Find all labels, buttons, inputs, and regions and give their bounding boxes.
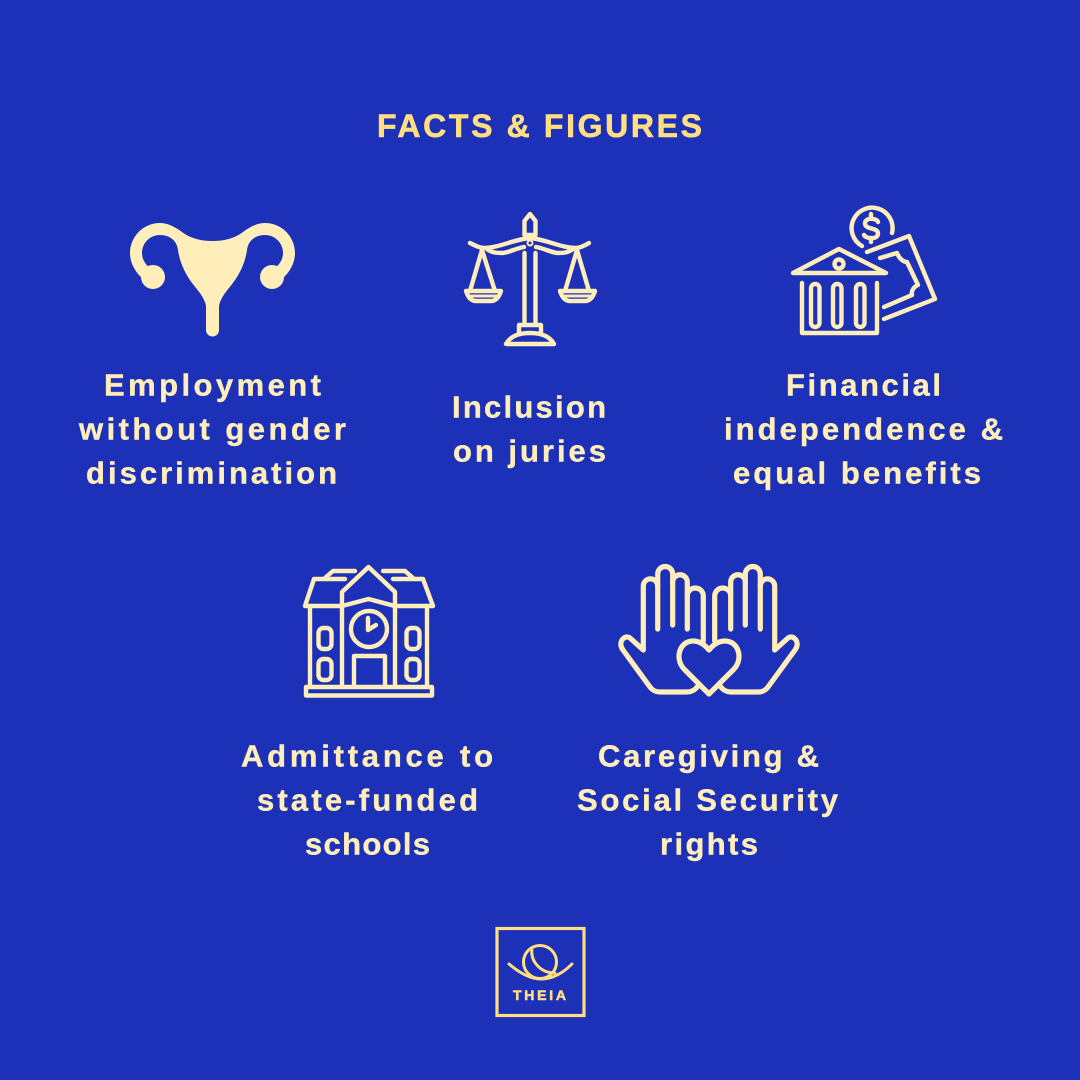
icon: bank with money [793, 208, 935, 333]
label: juries: Inclusion [452, 390, 606, 424]
panel: schools [241, 567, 493, 862]
label: employment: discrimination [86, 456, 337, 490]
icon: scales of justice [466, 214, 595, 344]
logo wordmark: THEIA [513, 987, 566, 1003]
label: caregiving: rights [660, 826, 758, 862]
label: employment [78, 368, 346, 490]
label: employment: without gender [78, 412, 346, 446]
label: employment: Employment [104, 368, 321, 402]
heart [679, 641, 739, 694]
label: schools: state-funded [257, 782, 478, 818]
icon: hands holding heart [621, 567, 797, 694]
panel: employment [78, 223, 346, 490]
label: schools: schools [305, 826, 430, 862]
label: caregiving [577, 738, 839, 862]
label: caregiving: Social Security [577, 782, 839, 818]
right hand [715, 567, 797, 692]
label: juries: on juries [453, 434, 606, 468]
label: financial: equal benefits [733, 456, 981, 490]
logo mark [509, 946, 572, 979]
title: FACTS & FIGURES [377, 108, 702, 144]
label: caregiving: Caregiving & [598, 738, 819, 774]
left hand [621, 567, 703, 692]
logo: Theia [497, 928, 584, 1016]
label: schools [241, 738, 493, 862]
panel: caregiving [577, 567, 839, 862]
panel: financial [724, 208, 1003, 490]
label: financial: independence & [724, 412, 1003, 446]
label: schools: Admittance to [241, 738, 493, 774]
icon: uterus [130, 223, 295, 337]
label: financial [724, 368, 1003, 490]
label: juries [452, 390, 606, 468]
icon: school building [305, 567, 433, 696]
panel: juries [452, 214, 606, 468]
label: financial: Financial [786, 368, 941, 402]
